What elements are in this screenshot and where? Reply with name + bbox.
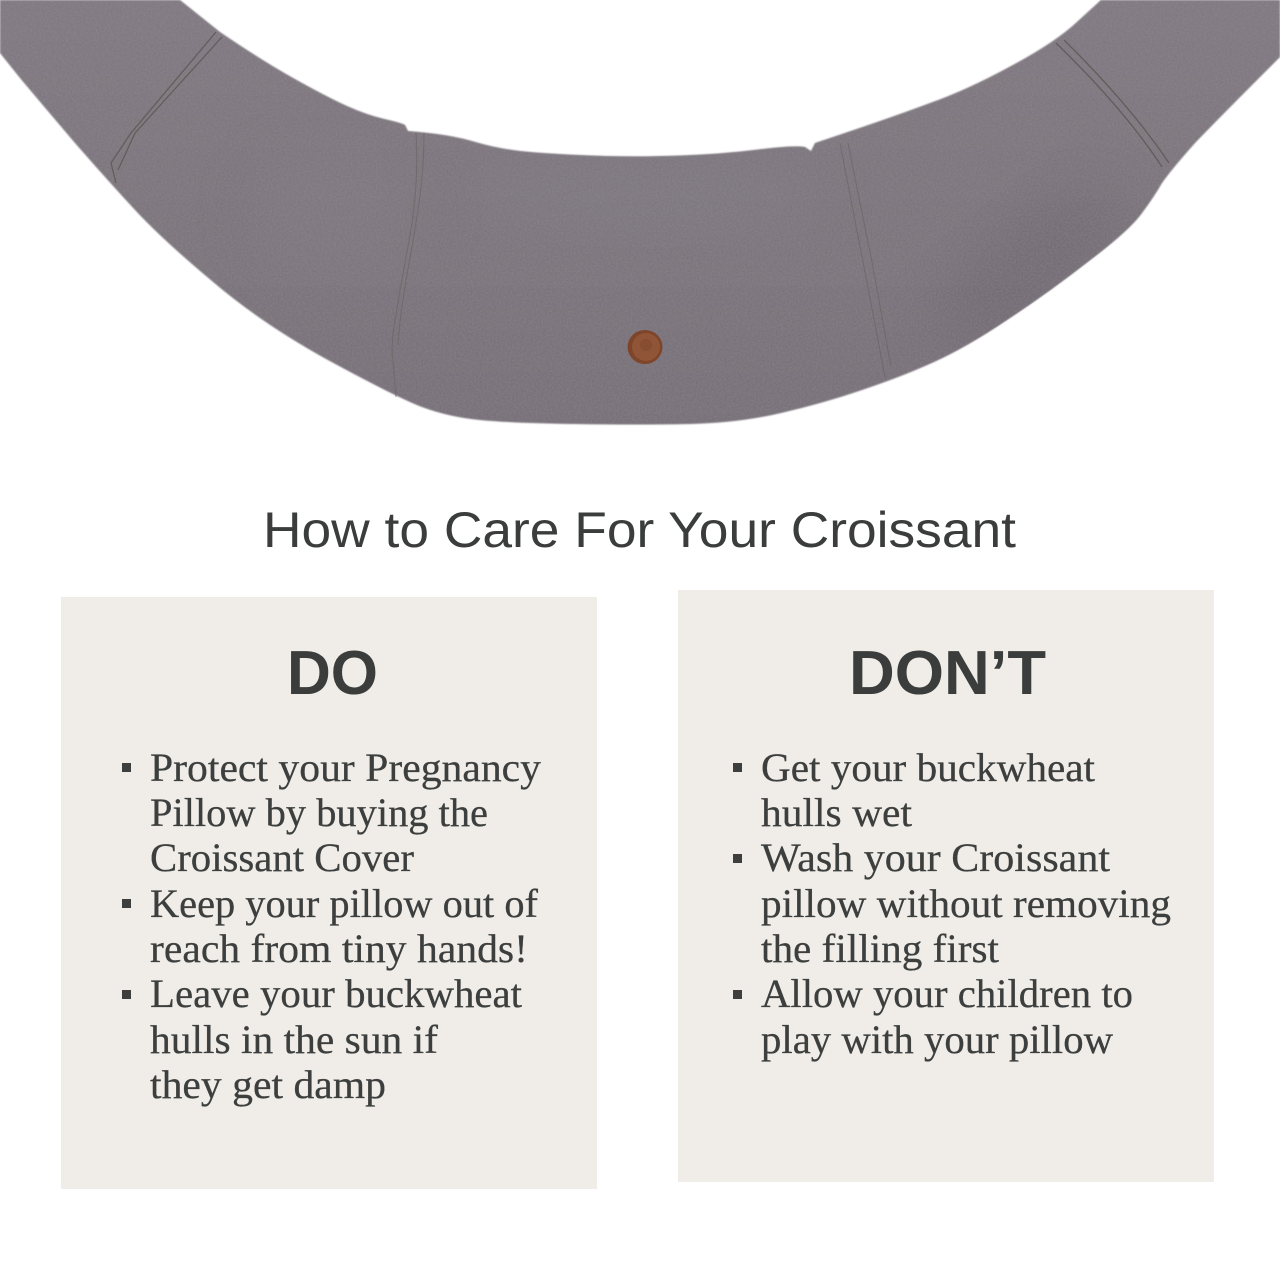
list: don't items: hulls wet — [761, 790, 912, 835]
panel: do — [61, 597, 597, 1189]
list: don't items: pillow without removing — [761, 881, 1171, 926]
title: How to Care For Your Croissant — [263, 502, 1016, 558]
list: do items: Pillow by buying the — [150, 790, 488, 835]
list: do items — [122, 745, 541, 1107]
list: do items: hulls in the sun if — [150, 1017, 439, 1062]
pillow photo — [0, 0, 1280, 430]
seam: centre right — [840, 143, 891, 377]
list: do items: Protect your Pregnancy — [150, 745, 541, 790]
list: don't items: Wash your Croissant — [761, 835, 1110, 880]
seam: far right — [1056, 40, 1169, 167]
heading: don't: DON’T — [849, 639, 1046, 708]
list: don't items: play with your pillow — [761, 1017, 1113, 1062]
list: do items: reach from tiny hands! — [150, 926, 528, 971]
list: don't items: Get your buckwheat — [761, 745, 1095, 790]
list: don't items: Allow your children to — [761, 971, 1133, 1016]
list: do items: Croissant Cover — [150, 835, 414, 880]
list: do items: Leave your buckwheat — [150, 971, 522, 1016]
seam: far left — [111, 32, 222, 183]
list: don't items: the filling first — [761, 926, 999, 971]
heading: do: DO — [287, 639, 378, 708]
list: do items: Keep your pillow out of — [150, 881, 539, 926]
list: don't items — [733, 745, 1171, 1062]
panel: don't — [678, 590, 1214, 1182]
icon: leather button — [628, 330, 662, 364]
list: do items: they get damp — [150, 1062, 386, 1107]
seam: centre left — [392, 133, 424, 397]
